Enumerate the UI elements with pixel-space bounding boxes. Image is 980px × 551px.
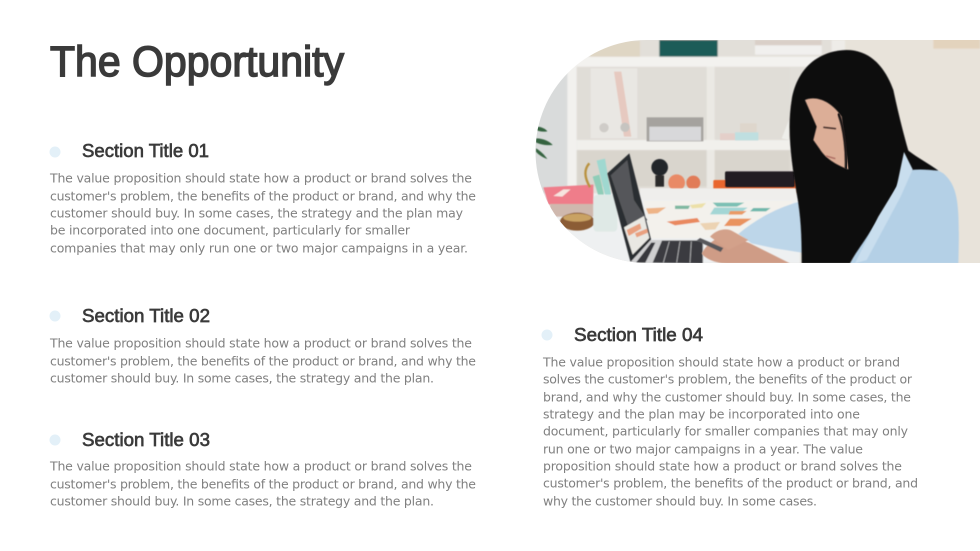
text block: section 01 body: be incorporated into one document, particularly for smaller [50,222,411,237]
section 04 [542,325,918,508]
paper with colourful notes [646,202,771,230]
photo: woman at desk using phone and laptop [530,30,980,270]
pink folders, bowl and pen cup [543,159,617,232]
icon: bullet dot 02 [50,310,60,322]
woman: blazer lapel and collar [855,152,913,263]
desk surface [537,193,800,263]
text block: section 04 body: document, particularly for smaller companies that may only [543,423,909,438]
text block: section 04 body: strategy and the plan may be incorporated into one [543,406,860,421]
text block: section 01 body: customer should buy. In some cases, the strategy and the plan may [50,205,464,220]
woman: hand and phone [697,229,790,263]
heading: section title 04: Section Title 04 [574,325,703,345]
text block: section 01 body: customer's problem, the benefits of the product or brand, and why the [50,188,476,203]
woman: blazer sleeve [738,202,807,253]
section 01 [49,141,476,255]
text block: section 04 body: solves the customer's problem, the benefits of the product or [543,371,913,386]
title: The Opportunity [50,38,344,86]
woman: facial features [823,127,836,159]
section 03 [49,430,476,508]
text block: section 01 body [49,170,476,255]
icon: bullet dot 01 [50,146,60,158]
text block: section 01 body: The value proposition should state how a product or brand solves the [49,170,472,185]
text block: section 04 body: brand, and why the customer should buy. In some cases, the [543,389,911,404]
woman: face [804,97,852,170]
text block: section 04 body: proposition should state how a product or brand solves the [543,458,902,473]
text block: section 01 body: companies that may only run one or two major campaigns in a year. [50,240,468,255]
text block: section 04 body: why the customer should buy. In some cases. [543,493,817,508]
text block: section 02 body: customer should buy. In some cases, the strategy and the plan. [50,370,434,385]
heading: section title 01: Section Title 01 [82,141,209,161]
text block: section 03 body: The value proposition should state how a product or brand solves the [49,458,472,473]
heading: section title 02: Section Title 02 [82,306,210,326]
wall and shelving backdrop [530,30,980,270]
heading: section title 03: Section Title 03 [82,430,210,450]
text block: section 03 body: customer's problem, the benefits of the product or brand, and why the [50,476,476,491]
text block: section 04 body: The value proposition should state how a product or brand [542,354,900,369]
laptop [607,153,703,263]
text block: section 04 body: run one or two major campaigns in a year. The value [543,441,863,456]
text block: section 02 body: The value proposition should state how a product or brand solves the [49,335,472,350]
icon: bullet dot 03 [50,434,60,446]
woman: hair [790,50,938,263]
text block: section 04 body [542,354,918,508]
woman: blazer torso [850,169,960,263]
text block: section 03 body [49,458,476,508]
text block: section 04 body: customer's problem, the benefits of the product or brand, and [543,475,918,490]
text block: section 02 body [49,335,476,385]
woman: hair strands over face [838,113,846,169]
text block: section 02 body: customer's problem, the benefits of the product or brand, and why the [50,353,476,368]
shelf objects [536,68,797,194]
section 02 [49,306,476,385]
icon: bullet dot 04 [542,330,552,340]
text block: section 03 body: customer should buy. In some cases, the strategy and the plan. [50,493,434,508]
